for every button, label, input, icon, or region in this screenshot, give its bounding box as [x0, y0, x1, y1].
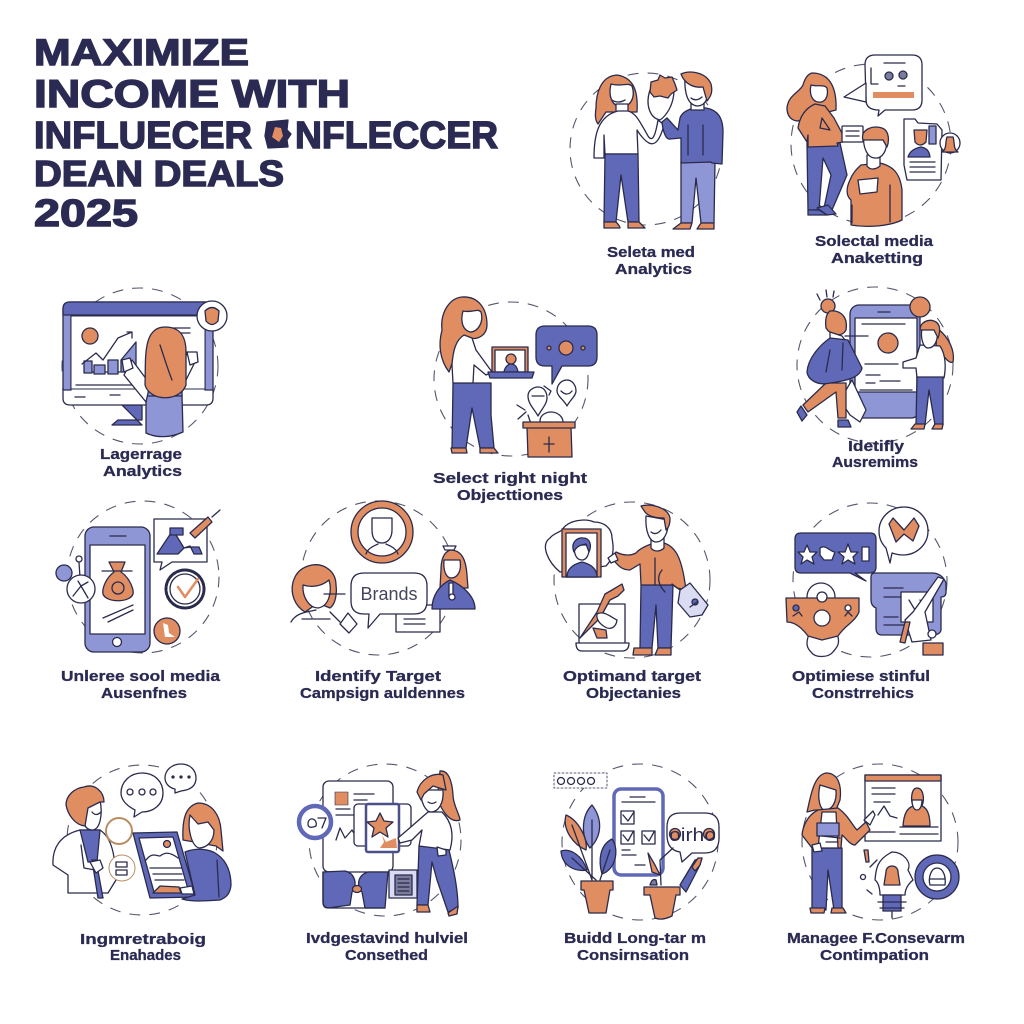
panel: unleash social media	[56, 501, 221, 702]
icon: gear badge	[915, 855, 959, 899]
icon: heads and paper	[323, 870, 417, 908]
icon: bag	[672, 583, 708, 617]
icon: left person	[291, 565, 357, 633]
label: Campsign auldennes	[300, 685, 465, 702]
label	[815, 233, 934, 267]
icon: profile ring	[351, 501, 413, 563]
icon: standing person	[903, 320, 953, 429]
panel: social media marketing	[787, 55, 960, 267]
icon: speech bubble	[844, 55, 922, 116]
icon: magnifier	[106, 818, 135, 881]
label: Ingmretraboig	[80, 931, 206, 948]
label: Managee F.Consevarm	[787, 930, 965, 947]
label: Anaketting	[831, 250, 923, 267]
icon: brands bubble	[351, 573, 440, 632]
icon: document	[323, 781, 393, 872]
label: Idetifly	[848, 438, 905, 455]
label	[61, 668, 221, 702]
icon: speech bubble	[536, 326, 597, 384]
label	[607, 244, 695, 278]
panel: identify target campaign	[291, 501, 475, 702]
icon: fan	[648, 75, 677, 120]
icon: phone with money bag	[85, 527, 150, 652]
label: Optimiese stinful	[792, 668, 930, 685]
panel: leveraging content	[299, 764, 468, 964]
icon: screen	[865, 775, 941, 841]
label	[306, 930, 468, 964]
label: Unleree sool media	[61, 668, 221, 685]
label: Objecttiones	[457, 487, 563, 504]
label: Enahades	[110, 947, 181, 964]
label: Analytics	[103, 463, 182, 480]
label: Constrrehics	[812, 685, 914, 702]
label	[563, 668, 701, 702]
label: Lagerrage	[100, 446, 182, 463]
label	[300, 668, 465, 702]
icon: man	[847, 127, 902, 226]
icon: right woman	[432, 546, 475, 609]
icon: monitor and hand	[871, 573, 946, 655]
icon: right plant	[644, 848, 702, 919]
label	[433, 470, 587, 504]
label: Identify Target	[315, 668, 441, 685]
icon: woman from behind	[122, 327, 198, 437]
title: NFLECCER	[295, 115, 498, 157]
icon: connection node	[56, 556, 95, 603]
icon: reaction pins	[517, 380, 576, 441]
icon: speech bubbles	[121, 764, 196, 817]
label: Consirnsation	[577, 947, 689, 964]
label	[80, 931, 206, 964]
icon: phone	[840, 297, 930, 422]
label: Ivdgestavind hulviel	[306, 930, 468, 947]
panel: optimise constraints	[786, 503, 947, 702]
title: MAXIMIZE	[34, 32, 249, 73]
icon: orange clock	[154, 618, 180, 644]
title: 2025	[34, 193, 138, 235]
icon: phone checklist	[614, 789, 663, 875]
icon: speech bubble: oirho	[669, 825, 716, 845]
label: Select right night	[433, 470, 587, 487]
icon: walking person with bag	[797, 290, 868, 427]
title: INCOME WITH	[34, 73, 350, 116]
title	[34, 32, 498, 235]
label	[100, 446, 182, 480]
icon: woman	[180, 803, 231, 901]
panel: leverage analytics	[62, 288, 227, 480]
panel: manage conversion	[787, 764, 965, 964]
title: INFLUECER	[34, 115, 252, 157]
icon: circle logo bubble	[879, 507, 928, 563]
icon: ring	[299, 806, 331, 838]
icon: laptop with carrot	[576, 584, 629, 651]
icon: man	[53, 786, 116, 898]
label: Consethed	[345, 947, 428, 964]
icon: light bulb	[860, 850, 913, 918]
panel: select right objectives	[433, 297, 597, 504]
icon: woman	[594, 75, 664, 228]
label	[792, 668, 930, 702]
label: Optimand target	[563, 668, 701, 685]
label	[787, 930, 965, 964]
panel: optimize target objectives	[545, 502, 710, 702]
label: Objectanies	[586, 685, 681, 702]
title: DEAN DEALS	[34, 153, 284, 194]
label: Buidd Long-tar m	[564, 930, 706, 947]
icon: phone with star	[354, 804, 411, 852]
icon: man	[662, 72, 723, 229]
icon: box	[523, 422, 575, 457]
label: Ausenfnes	[101, 685, 187, 702]
label	[564, 930, 706, 964]
icon: woman	[398, 771, 460, 916]
icon: card	[842, 126, 863, 142]
icon: picture bubble	[154, 510, 220, 570]
icon: cloud portrait	[545, 520, 613, 577]
panel: high five couple	[570, 72, 723, 278]
icon: tablet	[133, 832, 196, 898]
panel: integrate brand enhancers	[53, 764, 231, 964]
icon: monitor	[63, 301, 227, 425]
label: Ausremims	[832, 454, 918, 471]
icon: orange panel	[786, 583, 859, 656]
label	[832, 438, 918, 471]
icon: laptop	[488, 347, 534, 378]
panel: build long-term	[554, 764, 719, 964]
icon: check badge	[166, 570, 204, 608]
panel: identify audiences	[797, 287, 953, 471]
icon: speech bubble	[667, 813, 719, 862]
icon: man	[608, 505, 686, 655]
label: Contimpation	[820, 947, 929, 964]
icon: brands bubble: Brands	[360, 584, 418, 604]
icon: left plant	[561, 805, 616, 913]
icon: document	[904, 119, 960, 180]
icon: dots box	[554, 773, 607, 788]
icon: blue review bubble	[795, 533, 876, 581]
label: Analytics	[615, 261, 692, 278]
icon: woman presenter	[802, 773, 875, 913]
label: Seleta med	[607, 244, 695, 261]
label: Solectal media	[815, 233, 934, 250]
icon: woman	[440, 297, 498, 453]
icon: woman	[787, 73, 847, 215]
